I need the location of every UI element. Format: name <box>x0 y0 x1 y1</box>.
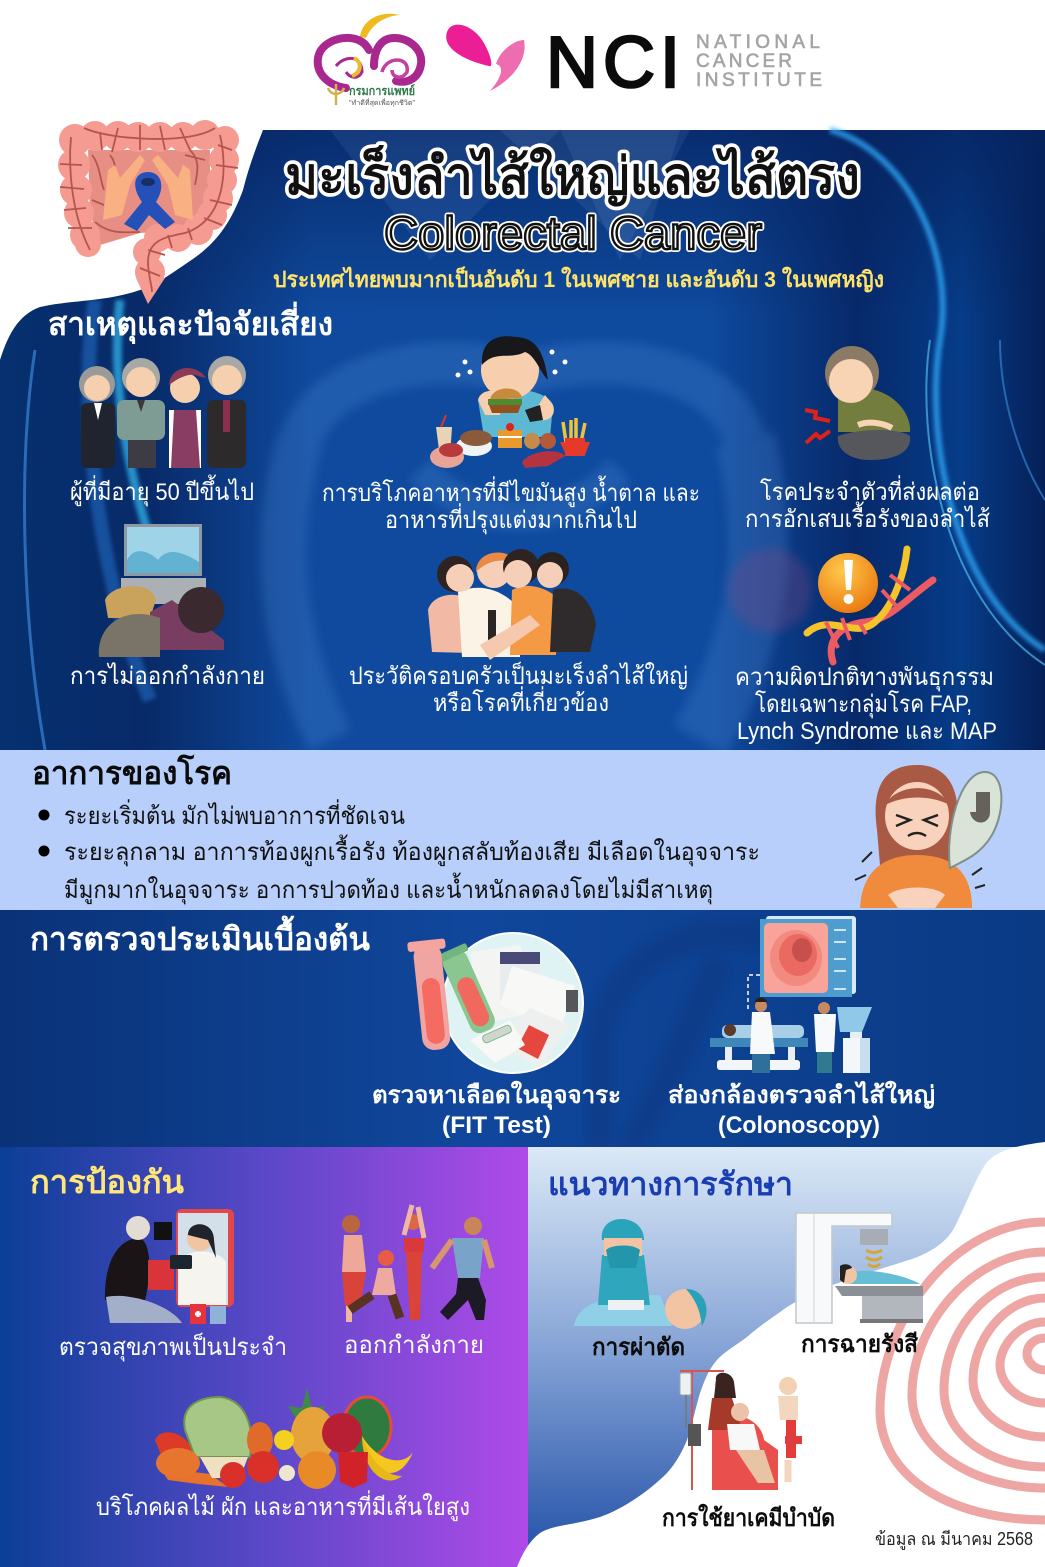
panel: causes and risk factors background <box>0 130 1045 750</box>
icon: sedentary person at computer <box>99 524 224 657</box>
text: family history: ประวัติครอบครัวเป็นมะเร็งลำไส้ใหญ่ <box>349 661 688 690</box>
icon: colonoscopy procedure <box>710 916 872 1073</box>
text: colonoscopy <box>668 1080 935 1139</box>
text: family history <box>349 661 688 717</box>
text: chronic disease <box>745 475 990 533</box>
text: FIT test: ตรวจหาเลือดในอุจจาระ <box>372 1080 621 1111</box>
text: radiotherapy: การฉายรังสี <box>801 1331 918 1358</box>
text: genetics: Lynch Syndrome และ MAP <box>737 718 997 745</box>
icon: radiotherapy machine <box>796 1213 923 1323</box>
bullet: advanced stage: มีมูกมากในอุจจาระ อาการปวดท้อง และน้ำหนักลดลงโดยไม่มีสาเหตุ <box>64 872 713 905</box>
text: FIT test: (FIT Test) <box>442 1112 551 1139</box>
icon: people exercising <box>342 1205 492 1322</box>
panel: treatment background <box>517 1142 1045 1567</box>
logo: Department of Medical Services: กรมการแพทย์ <box>349 84 415 98</box>
white corner behind intestine <box>0 130 263 360</box>
text: FIT test <box>372 1080 621 1139</box>
text: diet <box>322 475 700 535</box>
icon: elderly group <box>79 356 246 468</box>
icon: man with stomach pain <box>805 346 910 460</box>
text: chronic disease: การอักเสบเรื้อรังของลำไส้ <box>745 501 990 533</box>
decoration: pink spiral <box>880 1222 1045 1520</box>
icon: fruits and vegetables <box>155 1388 413 1489</box>
text: genetics <box>735 664 997 745</box>
text: exercise: ออกกำลังกาย <box>344 1332 484 1359</box>
icon: person with abdominal pain and toilet bubble <box>855 765 1001 908</box>
heading: symptoms: อาการของโรค <box>32 754 232 791</box>
text: colonoscopy: (Colonoscopy) <box>718 1112 880 1139</box>
heading: treatment: แนวทางการรักษา <box>548 1166 793 1202</box>
icon: eating fatty food <box>430 336 590 468</box>
text: colonoscopy: ส่องกล้องตรวจลำไส้ใหญ่ <box>668 1080 935 1109</box>
logo: Department of Medical Services: "ทำดีที่สุดเพื่อทุกชีวิต" <box>349 98 416 107</box>
logo: NCI wordmark <box>546 23 822 103</box>
text: chronic disease: โรคประจำตัวที่ส่งผลต่อ <box>760 475 980 506</box>
logo: NCI wordmark: INSTITUTE <box>696 70 822 91</box>
icon: DNA with warning <box>807 549 933 662</box>
text: genetics: ความผิดปกติทางพันธุกรรม <box>735 664 994 692</box>
subtitle: Colorectal Cancer <box>384 207 762 259</box>
text: chemotherapy: การใช้ยาเคมีบำบัด <box>662 1503 835 1532</box>
icon: surgery <box>574 1219 707 1329</box>
icon: large intestine with ribbon and hands <box>58 120 239 304</box>
title: มะเร็งลำไส้ใหญ่และไส้ตรง <box>285 146 860 206</box>
bullet: early stage: ระยะเริ่มต้น มักไม่พบอาการที่ชัดเจน <box>64 799 405 830</box>
heading: prevention: การป้องกัน <box>30 1164 184 1200</box>
icon: FIT test tubes and kit <box>407 933 583 1073</box>
text: age: ผู้ที่มีอายุ 50 ปีขึ้นไป <box>70 474 254 507</box>
subtitle: Colorectal Cancer <box>384 207 762 259</box>
text: fibre diet: บริโภคผลไม้ ผัก และอาหารที่มีเส้นใยสูง <box>96 1490 470 1522</box>
text: no exercise: การไม่ออกกำลังกาย <box>70 662 265 690</box>
panel: symptoms <box>0 750 1045 910</box>
panel: header background <box>0 0 1045 130</box>
text: surgery: การผ่าตัด <box>592 1334 685 1361</box>
logo: NCI wordmark: NCI <box>546 23 680 103</box>
logo: NCI butterfly mark <box>446 25 525 91</box>
panel: initial screening background <box>0 910 1045 1147</box>
bullet: advanced stage: ระยะลุกลาม อาการท้องผูกเรื้อรัง ท้องผูกสลับท้องเสีย มีเลือดในอุจจาระ <box>64 834 760 867</box>
text: diet: การบริโภคอาหารที่มีไขมันสูง น้ำตาล และ <box>322 475 700 508</box>
incidence line: ประเทศไทยพบมากเป็นอันดับ 1 ในเพศชาย และอันดับ 3 ในเพศหญิง <box>273 265 884 293</box>
heading: initial screening: การตรวจประเมินเบื้องต้น <box>30 915 370 957</box>
logo: NCI wordmark: CANCER <box>696 51 792 72</box>
panel: prevention background <box>0 1147 528 1567</box>
logo: Department of Medical Services <box>318 14 421 107</box>
text: family history: หรือโรคที่เกี่ยวข้อง <box>433 686 609 717</box>
text: diet: อาหารที่ปรุงแต่งมากเกินไป <box>385 503 637 535</box>
bullet: advanced stage <box>38 834 760 905</box>
title: มะเร็งลำไส้ใหญ่และไส้ตรง <box>285 145 860 207</box>
icon: health check-up <box>105 1209 234 1324</box>
text: regular check-up: ตรวจสุขภาพเป็นประจำ <box>59 1332 287 1362</box>
icon: family hugging <box>428 549 596 660</box>
heading: causes and risk factors: สาเหตุและปัจจัยเสี่ยง <box>48 301 333 345</box>
icon: chemotherapy <box>680 1371 802 1490</box>
logo: NCI wordmark: NATIONAL <box>696 32 820 53</box>
text: genetics: โดยเฉพาะกลุ่มโรค FAP, <box>755 690 972 719</box>
